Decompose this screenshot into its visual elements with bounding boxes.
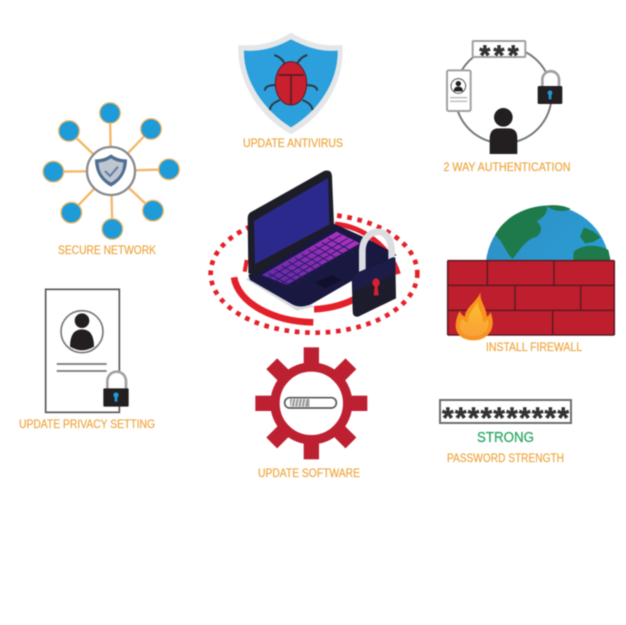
padlock: [352, 232, 396, 317]
red arcs: [234, 224, 398, 322]
network diagram: [43, 103, 179, 239]
authentication diagram: ***: [479, 39, 519, 70]
label: 2 way authentication: 2 WAY AUTHENTICATION: [444, 162, 570, 174]
panel: password strength: [440, 400, 571, 465]
strength: strong: STRONG: [477, 430, 534, 446]
password box: **********: [442, 402, 569, 435]
gear with progress bar: [255, 347, 367, 459]
globe and brick wall with flame: [448, 205, 614, 340]
label: install firewall: INSTALL FIREWALL: [486, 342, 583, 354]
panel: update antivirus: [238, 33, 343, 150]
label: password strength: PASSWORD STRENGTH: [447, 453, 564, 465]
panel: secure network: [43, 103, 179, 257]
laptop: [246, 170, 397, 311]
panel: central laptop with lock: [211, 170, 417, 333]
panel: update privacy setting: [19, 289, 155, 431]
label: update antivirus: UPDATE ANTIVIRUS: [243, 138, 343, 150]
panel: install firewall: [448, 205, 614, 354]
panel: 2 way authentication: [444, 39, 570, 174]
panel: update software: [255, 347, 367, 480]
label: secure network: SECURE NETWORK: [58, 245, 156, 257]
profile document with lock: [46, 289, 129, 412]
shield with bug icon: [238, 33, 343, 134]
label: update privacy setting: UPDATE PRIVACY SETTING: [19, 419, 155, 431]
dotted red ring: [211, 214, 417, 333]
infographic: [18, 32, 616, 478]
label: update software: UPDATE SOFTWARE: [258, 468, 360, 480]
